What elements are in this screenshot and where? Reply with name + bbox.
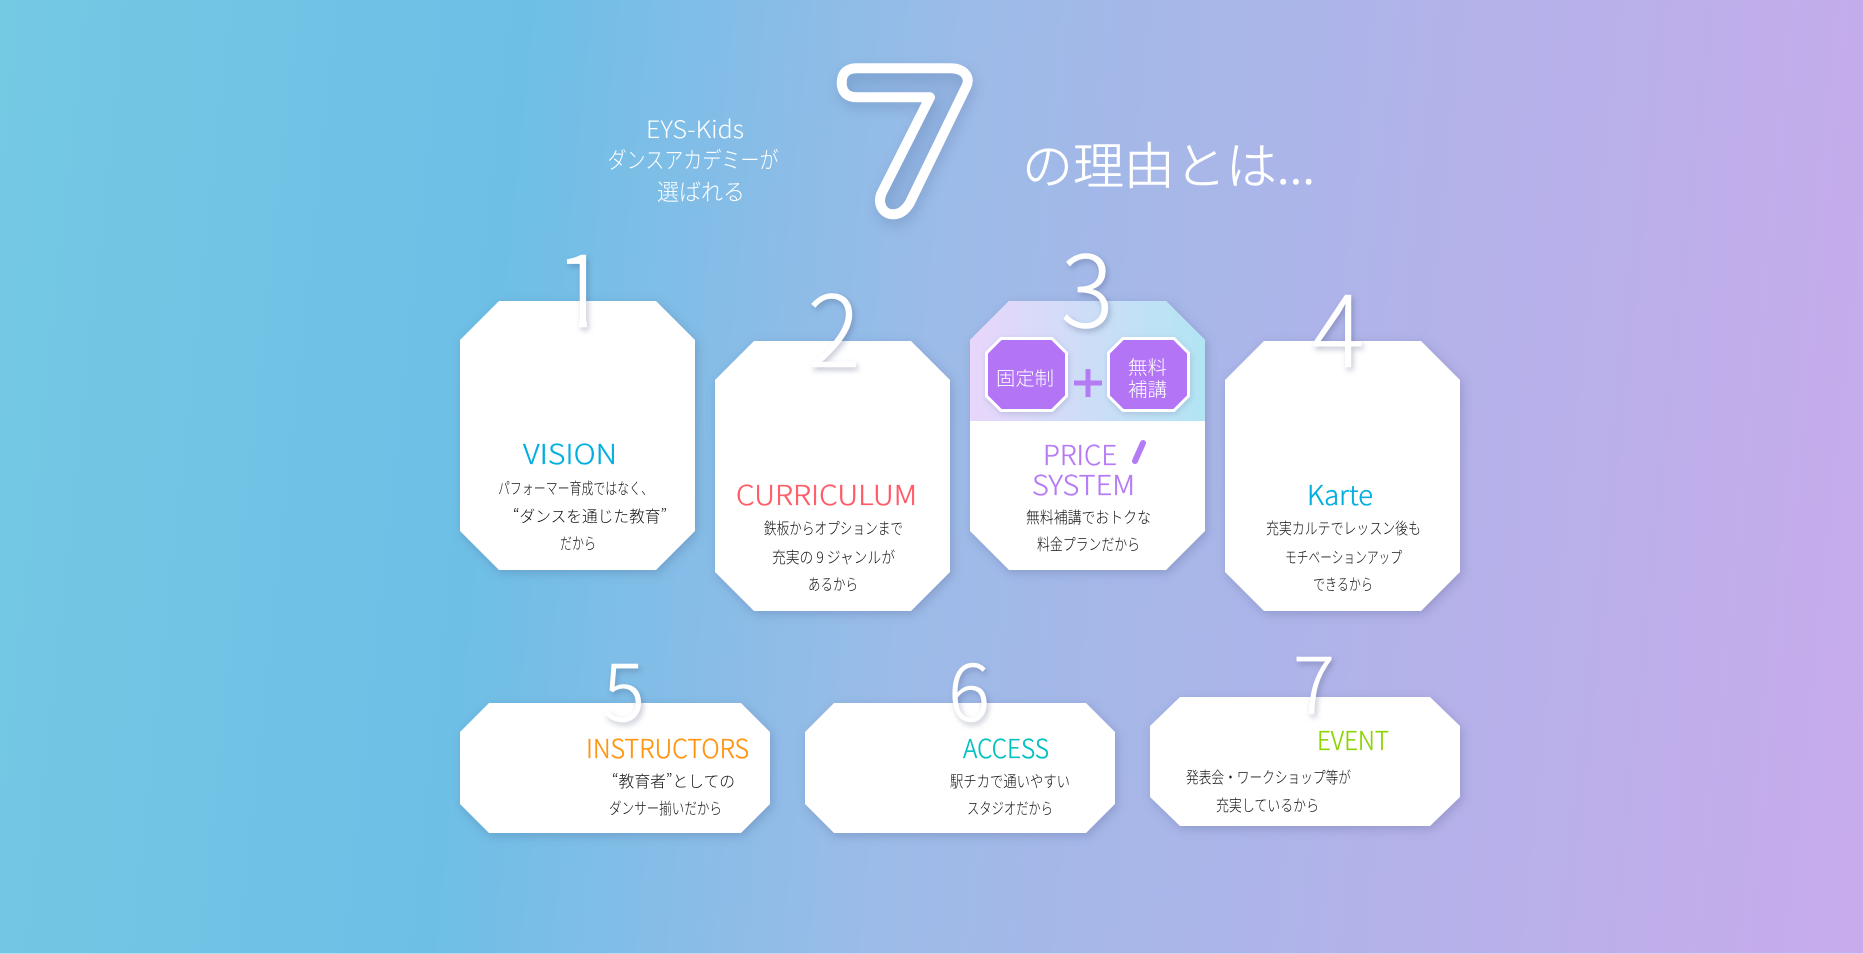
description: karte [1266, 515, 1421, 595]
badge: free make-up lessons [1108, 338, 1188, 410]
badge: fixed system [986, 338, 1066, 410]
panel: 7 event [1150, 697, 1460, 826]
title: karte: Karte [1307, 473, 1373, 513]
description: instructors [609, 768, 735, 819]
panel: 2 curriculum [715, 341, 950, 611]
description: vision: パフォーマー育成ではなく、 [498, 475, 653, 499]
heading: academy intro text: EYS-Kids [646, 110, 744, 145]
heading: academy intro text [608, 110, 778, 207]
description: karte: できるから [1313, 571, 1373, 595]
description: event [1186, 764, 1351, 816]
description: vision: “ダンスを通じた教育” [513, 503, 667, 527]
panel: 1 vision [460, 301, 695, 570]
description: karte: モチベーションアップ [1285, 544, 1402, 568]
heading: reasons text: の理由とは... [1022, 127, 1315, 199]
title: curriculum: CURRICULUM [736, 473, 917, 513]
heading [608, 68, 1315, 214]
title: access: ACCESS [963, 729, 1049, 766]
number 6: 6 [948, 632, 990, 744]
description: karte: 充実カルテでレッスン後も [1266, 515, 1421, 539]
title: price system: PRICE [1043, 433, 1117, 473]
description: event: 充実しているから [1216, 792, 1319, 816]
description: curriculum: 充実の 9 ジャンルが [772, 544, 895, 568]
number 7: 7 [1293, 625, 1335, 737]
description: vision [498, 475, 667, 554]
number 1: 1 [555, 212, 607, 356]
description: instructors: “教育者”としての [612, 768, 735, 792]
heading: academy intro text: ダンスアカデミーが [608, 141, 778, 175]
panel: 3 price system [970, 301, 1205, 570]
panel: 6 access [805, 703, 1115, 833]
heading: academy intro text: 選ばれる [657, 173, 745, 207]
description: curriculum [764, 515, 903, 595]
number 2: 2 [808, 252, 860, 396]
description: curriculum: 鉄板からオプションまで [764, 515, 903, 539]
description: instructors: ダンサー揃いだから [609, 795, 722, 819]
icon: plus [1074, 369, 1102, 397]
title: vision: VISION [523, 432, 617, 472]
title: event: EVENT [1317, 721, 1389, 758]
description: access: スタジオだから [967, 795, 1053, 819]
bottom edge line [0, 953, 1863, 954]
badge: fixed system: 固定制 [996, 364, 1054, 391]
title: instructors: INSTRUCTORS [586, 729, 749, 766]
description: price system [1026, 504, 1151, 555]
panel: 5 instructors [460, 703, 770, 833]
description: event: 発表会・ワークショップ等が [1186, 764, 1351, 788]
description: price system: 料金プランだから [1037, 531, 1140, 555]
badge: free make-up lessons: 無料 [1128, 353, 1167, 380]
title: price system: SYSTEM [1032, 463, 1135, 503]
number 4: 4 [1312, 252, 1364, 396]
description: curriculum: あるから [808, 571, 858, 595]
description: vision: だから [560, 530, 596, 554]
number 5: 5 [603, 632, 645, 744]
description: access [950, 768, 1070, 819]
number 3: 3 [1061, 212, 1113, 356]
description: price system: 無料補講でおトクな [1026, 504, 1151, 528]
description: access: 駅チカで通いやすい [950, 768, 1070, 792]
title: price system [1032, 433, 1143, 503]
panel: 4 karte [1225, 341, 1460, 611]
price band [970, 301, 1205, 421]
badge: free make-up lessons: 補講 [1128, 375, 1167, 402]
heading: large outlined 7 [842, 68, 968, 214]
